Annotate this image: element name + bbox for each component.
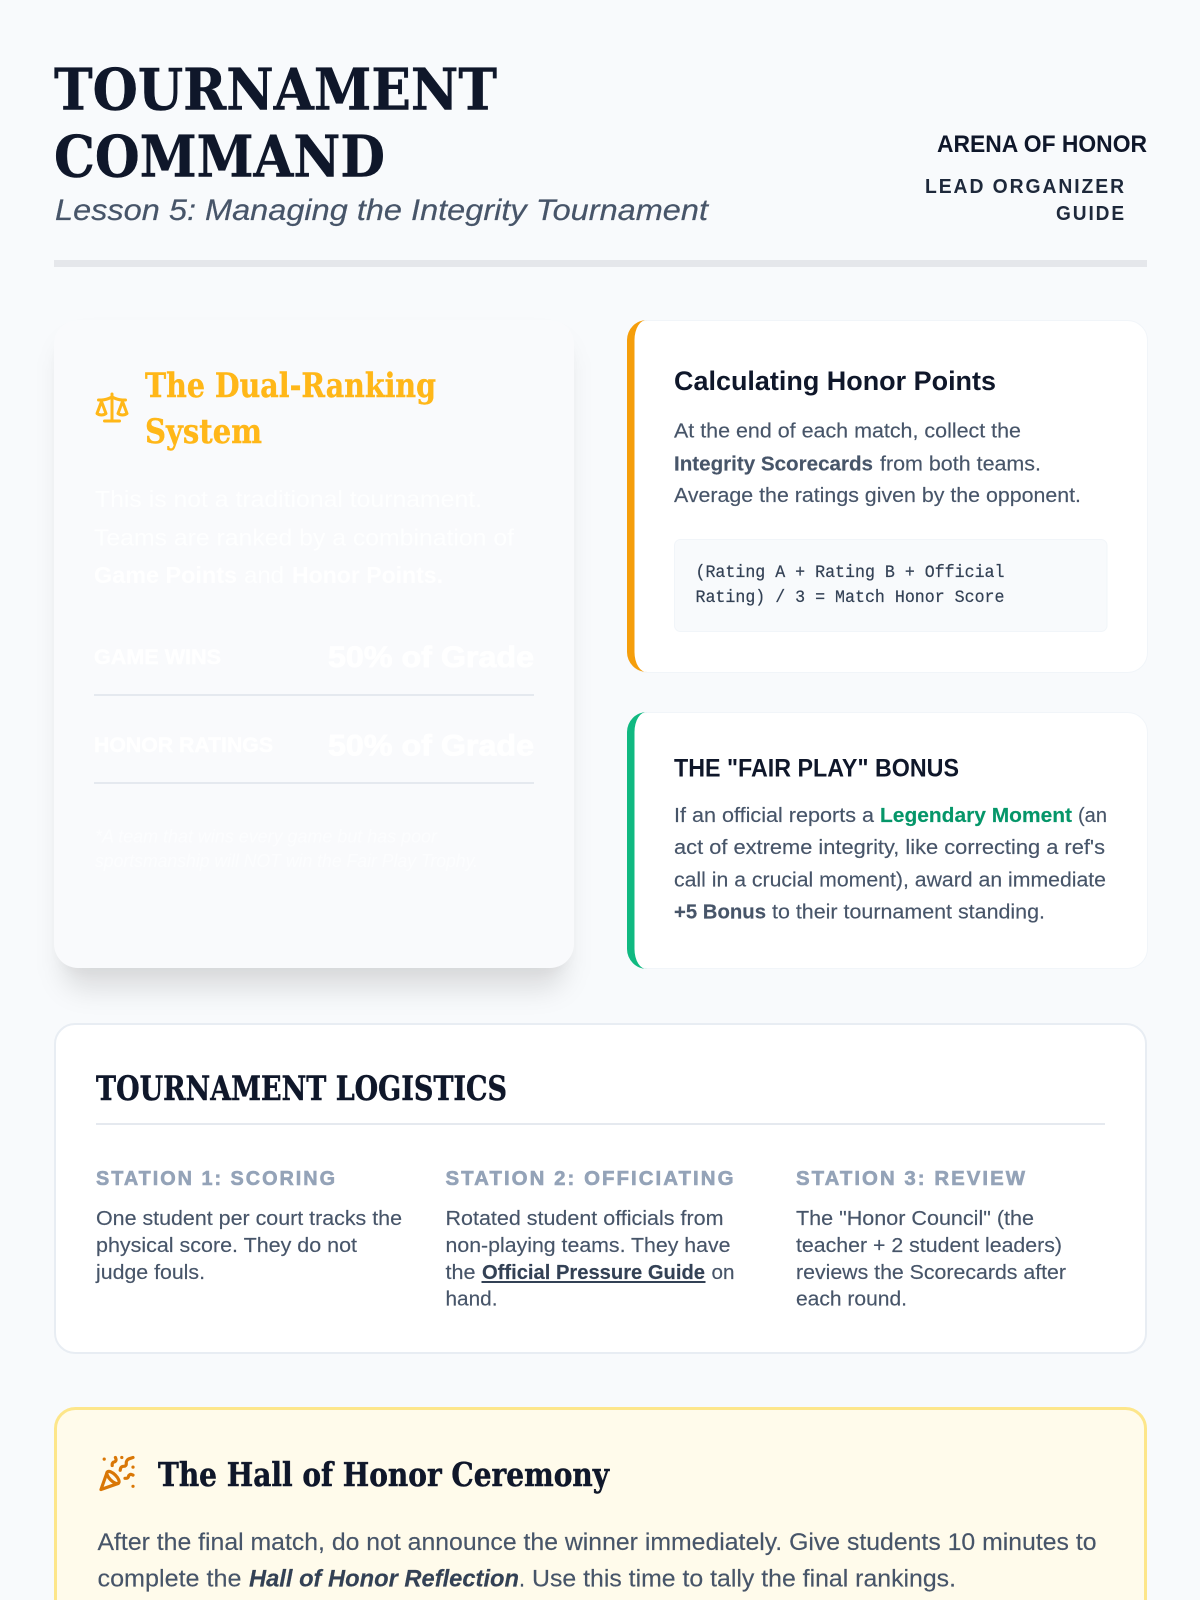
station 2: on <box>712 1262 734 1284</box>
panel: tournament logistics <box>55 1024 1146 1353</box>
row: game wins <box>94 641 534 696</box>
title <box>54 56 497 190</box>
station 3 <box>796 1168 1066 1310</box>
intro text: Honor Points. <box>292 562 443 588</box>
station 3: each round. <box>796 1288 907 1310</box>
body text <box>674 420 1081 507</box>
panel: calculating honor points <box>627 320 1148 672</box>
body text: complete the <box>98 1566 242 1592</box>
station 1: judge fouls. <box>95 1262 205 1284</box>
station 3: reviews the Scorecards after <box>796 1262 1066 1284</box>
formula box <box>674 540 1107 632</box>
body text: Use this time to tally the final rankings. <box>532 1566 956 1592</box>
station 1: physical score. They do not <box>96 1235 357 1257</box>
footnote <box>95 826 478 871</box>
intro text <box>94 486 514 588</box>
station 2: Rotated student officials from <box>446 1208 724 1230</box>
station 2: Official Pressure Guide <box>482 1262 705 1284</box>
intro text: This is not a traditional tournament. <box>95 486 482 512</box>
body text: call in a crucial moment), award an immediate <box>674 868 1106 892</box>
body text: Average the ratings given by the opponent. <box>674 484 1081 507</box>
body text: After the final match, do not announce the winner immediately. Give students 10 minutes to <box>98 1529 1096 1556</box>
station 3: STATION 3: REVIEW <box>796 1168 1027 1190</box>
header right label: LEAD ORGANIZER <box>925 176 1126 198</box>
formula box: Rating) / 3 = Match Honor Score <box>696 589 1004 608</box>
row: game wins: 50% of Grade <box>328 641 534 674</box>
station 2: STATION 2: OFFICIATING <box>446 1168 736 1190</box>
row: honor ratings: 50% of Grade <box>328 730 534 762</box>
station 1: One student per court tracks the <box>96 1208 402 1230</box>
footnote: sportsmanship will NOT win the Fair Play Trophy. <box>95 851 478 871</box>
row: honor ratings: HONOR RATINGS <box>94 733 273 757</box>
station 2: non-playing teams. They have <box>446 1235 730 1257</box>
body text: +5 Bonus <box>674 900 766 924</box>
header <box>54 56 1147 267</box>
body text: Integrity Scorecards <box>674 452 873 476</box>
body text <box>98 1529 1096 1592</box>
body text: If an official reports a <box>674 804 875 827</box>
footnote: *A team that wins every game but has poor <box>95 826 438 846</box>
body text: act of extreme integrity, like correcting a ref's <box>674 836 1105 859</box>
body text <box>674 804 1107 924</box>
station 2: the <box>446 1262 476 1284</box>
intro text: Game Points <box>94 562 237 588</box>
heading: THE "FAIR PLAY" BONUS <box>674 754 959 782</box>
body text: . <box>519 1566 525 1592</box>
station 2 <box>446 1168 736 1310</box>
body text: Hall of Honor Reflection <box>249 1566 519 1592</box>
body text: from both teams. <box>880 452 1041 476</box>
station 1 <box>95 1168 402 1284</box>
subtitle: Lesson 5: Managing the Integrity Tournament <box>55 194 710 227</box>
header right label <box>925 131 1147 225</box>
station 1: STATION 1: SCORING <box>96 1168 337 1190</box>
station 2: hand. <box>446 1288 498 1310</box>
heading: The Dual-Ranking <box>145 366 436 406</box>
heading: TOURNAMENT LOGISTICS <box>96 1069 507 1108</box>
title: COMMAND <box>54 124 385 190</box>
heading: The Hall of Honor Ceremony <box>158 1455 610 1494</box>
header right label: GUIDE <box>1056 203 1126 225</box>
intro text: and <box>244 562 284 588</box>
station 3: teacher + 2 student leaders) <box>796 1235 1062 1257</box>
panel: hall of honor ceremony <box>56 1408 1146 1600</box>
icon: balance scale <box>97 394 127 421</box>
icon: party popper <box>101 1458 133 1490</box>
body text: to their tournament standing. <box>772 900 1045 924</box>
row: game wins: GAME WINS <box>94 645 221 669</box>
heading: System <box>145 412 262 452</box>
body text: Legendary Moment <box>880 804 1072 827</box>
heading <box>145 366 436 452</box>
station 3: The "Honor Council" (the <box>796 1208 1034 1230</box>
panel: dual-ranking system <box>54 320 574 990</box>
header right label: ARENA OF HONOR <box>937 131 1147 158</box>
body text: (an <box>1078 804 1107 827</box>
row: honor ratings <box>94 730 534 784</box>
body text: At the end of each match, collect the <box>674 420 1021 442</box>
formula box: (Rating A + Rating B + Official <box>696 564 1004 583</box>
intro text: Teams are ranked by a combination of <box>94 524 514 550</box>
heading: Calculating Honor Points <box>674 366 996 396</box>
title: TOURNAMENT <box>54 56 497 124</box>
panel: fair play bonus <box>627 712 1148 969</box>
